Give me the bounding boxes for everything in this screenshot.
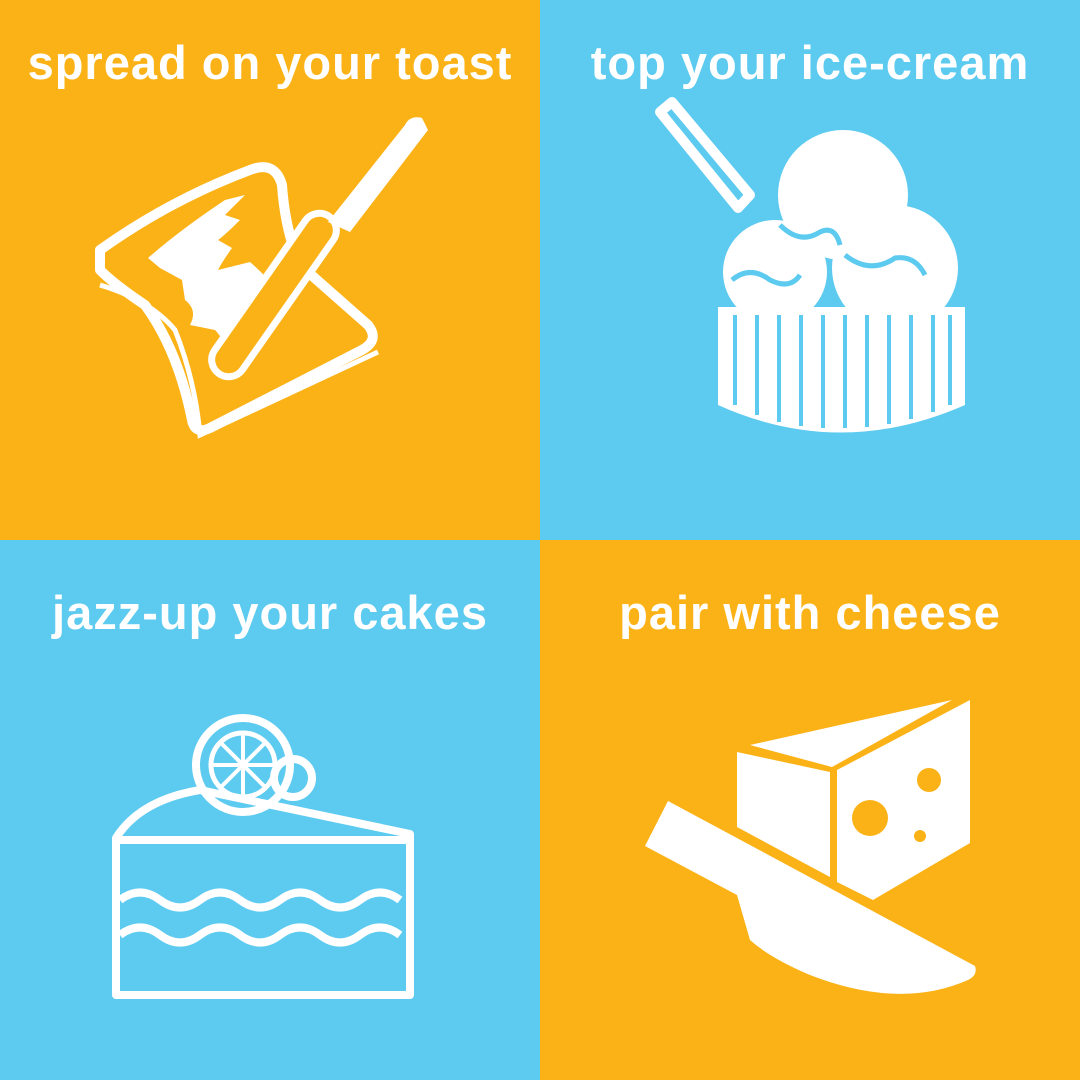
icon: cake slice xyxy=(116,718,410,995)
heading: cakes: jazz-up your cakes xyxy=(52,586,488,639)
icon: ice-cream bowl xyxy=(660,102,965,432)
icon: toast with knife xyxy=(100,117,428,435)
panel: toast xyxy=(0,0,540,540)
heading: cheese: pair with cheese xyxy=(619,586,1001,639)
panel: cakes xyxy=(0,540,540,1080)
heading: toast: spread on your toast xyxy=(28,36,512,89)
heading: ice-cream: top your ice-cream xyxy=(591,36,1029,89)
icon: cheese and knife xyxy=(645,700,976,994)
panel: cheese xyxy=(540,540,1080,1080)
panel: ice-cream xyxy=(540,0,1080,540)
